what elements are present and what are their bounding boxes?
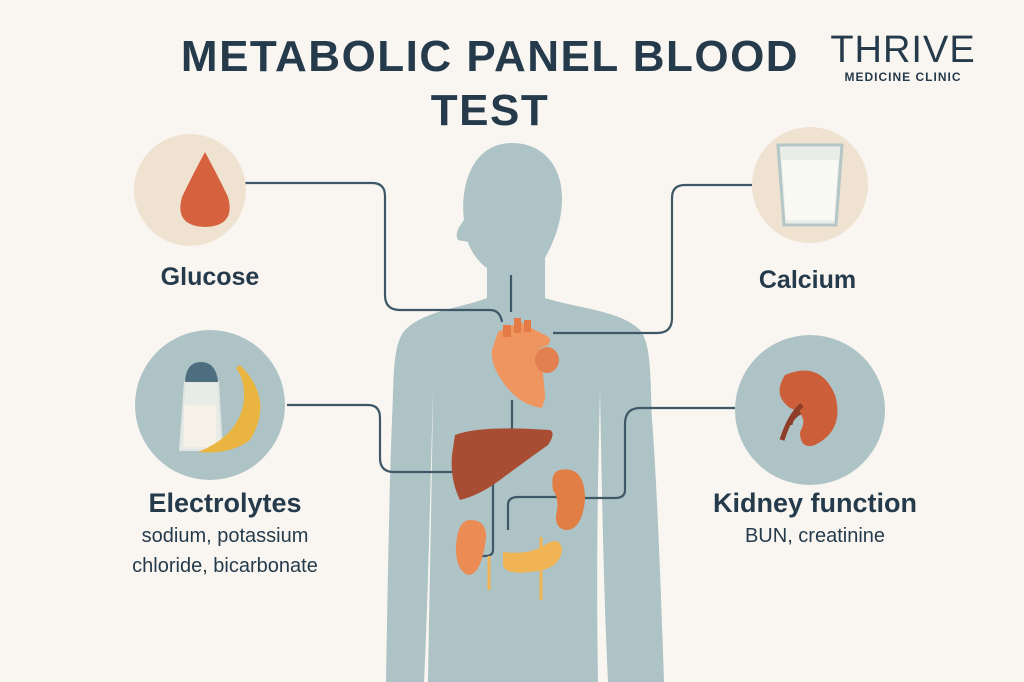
connectors — [245, 183, 752, 556]
title: METABOLIC PANEL BLOOD — [181, 32, 799, 81]
label: electrolytes: chloride, bicarbonate — [132, 555, 318, 577]
icon: blood drop — [134, 134, 246, 246]
body silhouette — [386, 143, 664, 682]
logo: MEDICINE CLINIC — [844, 70, 962, 84]
label: electrolytes: Electrolytes — [148, 488, 302, 518]
icon: kidney — [735, 335, 885, 485]
organs — [452, 318, 585, 600]
label: electrolytes: sodium, potassium — [142, 525, 308, 547]
icon: salt and banana — [135, 330, 285, 480]
label: kidney function — [713, 488, 917, 547]
icon: glass of milk — [752, 127, 868, 243]
label: calcium: Calcium — [759, 266, 856, 294]
title — [181, 32, 799, 135]
label: electrolytes — [132, 488, 318, 577]
label: kidney function: Kidney function — [713, 488, 917, 518]
title: TEST — [431, 86, 549, 135]
label: kidney function: BUN, creatinine — [745, 525, 885, 547]
logo: THRIVE — [830, 29, 976, 71]
label: glucose: Glucose — [161, 263, 259, 291]
